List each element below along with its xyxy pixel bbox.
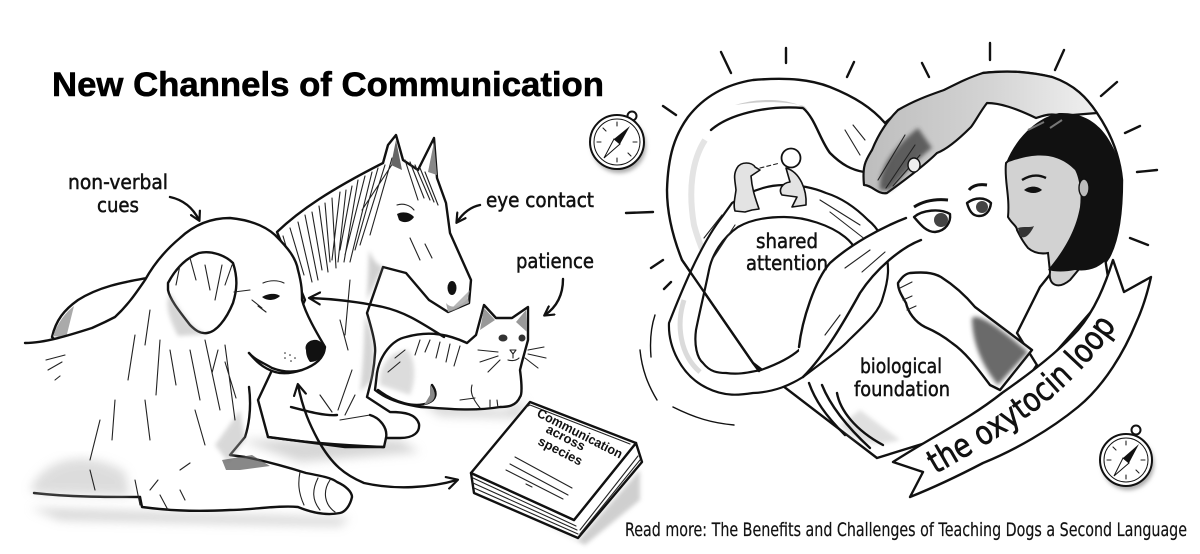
ribbon from eye: [799, 218, 921, 377]
arrow: eye contact: [457, 205, 480, 222]
banner text: the oxytocin loop: [926, 318, 1116, 472]
dog fur strokes: [46, 258, 236, 510]
dog mouth: [249, 353, 302, 372]
heart outline: [667, 72, 1122, 458]
book pages: [471, 443, 642, 538]
horse face details: [397, 212, 414, 222]
heart inner band: [691, 140, 708, 262]
book lines: [506, 457, 572, 499]
label: eye contact: eye contact: [486, 188, 594, 212]
label: non-verbal cues: cues: [97, 193, 139, 217]
infinity band: [669, 185, 888, 395]
cat body: [375, 305, 528, 409]
book title: across: [544, 421, 588, 454]
arrow: dog to book: [298, 385, 457, 487]
shared attention text: [746, 229, 828, 275]
eye left: [914, 210, 950, 232]
dog face details: [262, 294, 280, 300]
arrow: cat to dog: [310, 298, 444, 337]
biological foundation text: biological: [860, 354, 942, 378]
heart rays: [626, 43, 1157, 425]
banner: the oxytocin loop: [892, 258, 1152, 498]
woman: [1006, 113, 1122, 370]
arrow: patience: [545, 279, 563, 315]
dog ear: [168, 252, 236, 333]
cat shading: [380, 350, 414, 395]
illustration: cat: [375, 305, 546, 409]
horse neck shading: [360, 315, 374, 392]
illustration: golden dog: [25, 218, 352, 514]
dog front paw toes: [299, 472, 335, 512]
shared attention text: shared: [756, 229, 818, 253]
arrow: non-verbal cues: [170, 197, 199, 220]
book: [471, 402, 642, 545]
shared attention text: attention: [746, 251, 828, 275]
icon: dog and person: [734, 148, 806, 212]
illustration: horse: [52, 135, 471, 447]
cat tail and paw: [378, 385, 435, 405]
compass: right: [1100, 426, 1154, 490]
horse neck and chest: [258, 135, 471, 447]
book cover: [471, 402, 636, 520]
dog paw: [898, 272, 1032, 390]
eye right: [967, 198, 991, 216]
arm and hand reaching: [863, 72, 1097, 193]
label: patience: patience: [516, 249, 594, 273]
biological foundation text: foundation: [854, 377, 950, 401]
dog body fill: [25, 218, 352, 514]
ground shadows: [30, 400, 525, 526]
biological foundation text: [854, 354, 950, 401]
floating eyes: [914, 185, 991, 232]
dog nose: [306, 340, 325, 362]
woman face features: [1024, 187, 1042, 193]
woman clothing: [1017, 258, 1110, 370]
compass: left: [590, 112, 646, 173]
dog outline: [25, 218, 325, 373]
dog left fur shading: [30, 459, 130, 496]
woman neck and face: [1006, 140, 1090, 285]
cat face: [498, 334, 508, 342]
lower heart shade: [840, 410, 900, 444]
label: non-verbal cues: non-verbal: [68, 170, 168, 194]
label: non-verbal cues: [68, 170, 168, 217]
horse back: [52, 278, 180, 345]
horse mane: [283, 158, 438, 282]
book shadow: [480, 470, 640, 545]
woman hair: [1006, 113, 1122, 272]
book title: Communication: [535, 405, 625, 461]
heart line over left band: [682, 260, 759, 371]
title: New Channels of Communication: [52, 66, 604, 104]
horse chest detail: [320, 280, 370, 420]
heart with oxytocin loop: [666, 70, 1152, 498]
hand shading: [880, 128, 932, 190]
band shading: [680, 300, 700, 372]
book title: species: [536, 433, 585, 468]
